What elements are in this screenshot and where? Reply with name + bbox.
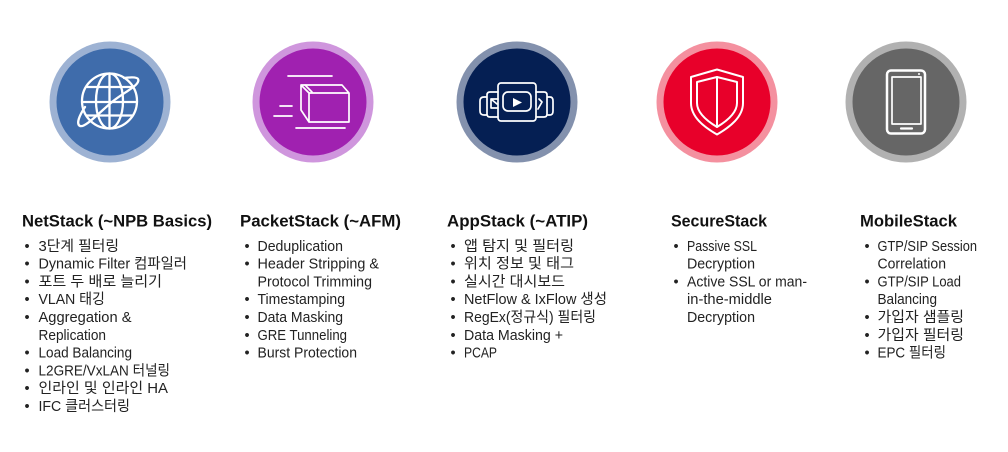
list: AppStack features: PCAP [464,346,497,362]
list: NetStack features: • [24,274,30,290]
list: NetStack features: Aggregation & [38,310,132,326]
list: MobileStack features: • [864,346,870,362]
list: PacketStack features: Deduplication [258,239,343,255]
list: SecureStack features [674,239,807,326]
list: MobileStack features [864,239,977,362]
list: MobileStack features: GTP/SIP Session [878,239,977,255]
list: MobileStack features: • [864,239,870,255]
heading: PacketStack: PacketStack (~AFM) [240,212,401,230]
list: NetStack features: 인라인 및 인라인 HA [38,380,168,397]
list: AppStack features: • [450,328,456,344]
list: MobileStack features: Balancing [878,292,937,308]
list: NetStack features: • [24,346,30,362]
list: MobileStack features: • [864,328,870,344]
list: SecureStack features: Passive SSL [687,239,757,255]
list: NetStack features: Replication [38,328,106,344]
list: AppStack features: • [450,292,456,308]
list: NetStack features: • [24,292,30,308]
list: PacketStack features: Header Stripping & [258,256,379,272]
list: AppStack features: 앱 탐지 및 필터링 [464,238,574,255]
list: NetStack features: VLAN 태깅 [38,291,105,308]
list: NetStack features [24,238,187,415]
list: SecureStack features: in-the-middle [687,292,772,308]
list: MobileStack features: • [864,274,870,290]
list: SecureStack features: Decryption [687,256,755,272]
list: MobileStack features: • [864,310,870,326]
list: SecureStack features: • [674,274,679,290]
list: MobileStack features: 가입자 샘플링 [878,309,964,326]
panel: MobileStack [846,42,977,362]
list: PacketStack features: Timestamping [258,292,345,308]
icon: globe badge [50,42,170,162]
list: PacketStack features: • [244,292,250,308]
heading: MobileStack: MobileStack [860,212,958,230]
list: NetStack features: Dynamic Filter 컴파일러 [38,256,187,272]
heading: NetStack: NetStack (~NPB Basics) [22,212,212,230]
list: PacketStack features: GRE Tunneling [258,328,347,344]
panel: AppStack [447,42,607,362]
list: NetStack features: • [24,381,30,397]
list: AppStack features: Data Masking + [464,328,563,344]
list: SecureStack features: Active SSL or man- [687,274,807,290]
list: PacketStack features: Burst Protection [258,346,357,362]
list: AppStack features: • [450,346,456,362]
list: NetStack features: IFC 클러스터링 [38,398,130,415]
heading: AppStack: AppStack (~ATIP) [447,212,588,230]
list: NetStack features: • [24,256,30,272]
list: SecureStack features: • [674,239,679,255]
list: MobileStack features: GTP/SIP Load [878,274,961,290]
list: NetStack features: • [24,239,30,255]
list: PacketStack features: • [244,310,250,326]
list: AppStack features: • [450,256,456,272]
list: NetStack features: • [24,399,30,415]
list: AppStack features: • [450,310,456,326]
heading: SecureStack: SecureStack [671,212,768,230]
list: PacketStack features: Protocol Trimming [258,274,372,290]
list: PacketStack features: • [244,239,250,255]
icon: video app badge [456,42,578,162]
list: SecureStack features: Decryption [687,310,755,326]
list: AppStack features: • [450,274,456,290]
list: NetStack features: L2GRE/VxLAN 터널링 [38,362,170,380]
list: PacketStack features: • [244,346,250,362]
list: PacketStack features: • [244,256,250,272]
panel: NetStack [22,42,212,415]
list: MobileStack features: 가입자 필터링 [878,327,964,344]
panel: PacketStack [240,42,401,362]
list: NetStack features: 포트 두 배로 늘리기 [38,274,162,290]
list: MobileStack features: Correlation [878,256,946,272]
list: NetStack features: • [24,310,30,326]
list: NetStack features: 3단계 필터링 [38,238,119,255]
list: AppStack features [450,238,607,362]
list: AppStack features: RegEx(정규식) 필터링 [464,309,596,326]
list: AppStack features: 위치 정보 및 태그 [464,256,574,272]
list: AppStack features: 실시간 대시보드 [464,274,565,290]
list: NetStack features: Load Balancing [38,346,132,362]
list: PacketStack features: • [244,328,250,344]
icon: smartphone badge [846,42,966,162]
list: MobileStack features: EPC 필터링 [878,344,946,362]
icon: shield badge [656,42,778,162]
list: PacketStack features: Data Masking [258,310,343,326]
list: NetStack features: • [24,364,30,380]
panel: SecureStack [656,42,807,326]
list: AppStack features: NetFlow & IxFlow 생성 [464,291,607,308]
list: AppStack features: • [450,239,456,255]
icon: moving box badge [252,42,374,162]
list: PacketStack features [244,239,379,362]
